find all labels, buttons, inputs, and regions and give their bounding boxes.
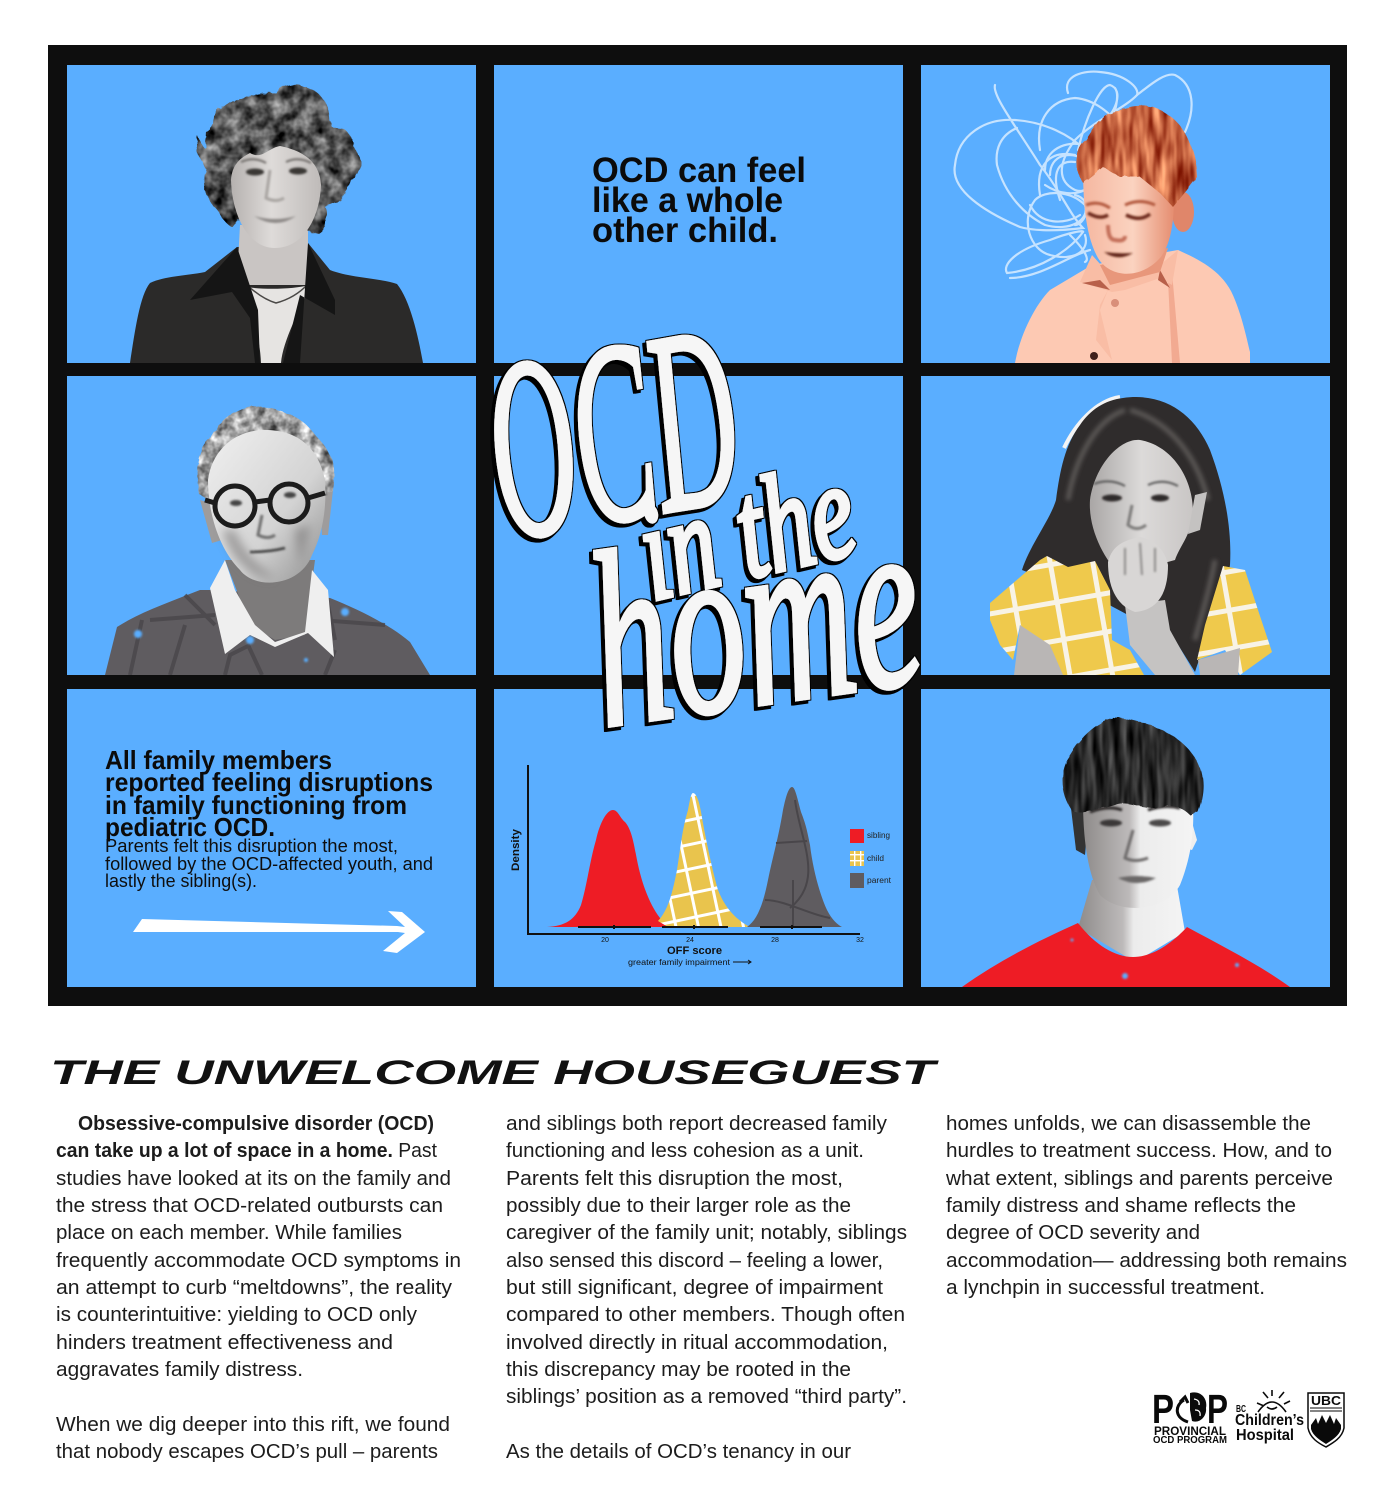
panel heading: pediatric OCD. bbox=[105, 812, 275, 842]
panel heading: reported feeling disruptions bbox=[105, 767, 433, 797]
x tick labels bbox=[601, 937, 864, 944]
article column 3: what extent, siblings and parents perceive bbox=[945, 1168, 1333, 1190]
script title: OCD in the home: OCD bbox=[465, 271, 758, 595]
script title: OCD in the home: in the bbox=[624, 432, 868, 629]
boy shirt shading bbox=[1096, 272, 1180, 363]
article column 1 bbox=[56, 1113, 461, 1463]
girl left shirt bbox=[990, 556, 1144, 675]
y axis label: Density bbox=[510, 828, 522, 871]
woman t-shirt bbox=[251, 286, 305, 363]
quote heading: OCD can feel bbox=[592, 151, 806, 190]
article column 2: caregiver of the family unit; notably, siblings bbox=[506, 1222, 907, 1244]
woman neck bbox=[238, 225, 308, 285]
logo: BC Children's Hospital: BC bbox=[1236, 1404, 1246, 1415]
article column 1: aggravates family distress. bbox=[56, 1359, 303, 1381]
axes bbox=[528, 765, 860, 934]
x tick labels: 20 bbox=[601, 937, 609, 944]
girl ear bbox=[1188, 492, 1207, 534]
legend: sibling bbox=[867, 831, 890, 840]
circular arrow icon bbox=[1177, 1397, 1188, 1422]
scribble bbox=[955, 72, 1192, 278]
man ears bbox=[200, 490, 333, 543]
x tick labels: 24 bbox=[686, 937, 694, 944]
article column 2: but still significant, degree of impairment bbox=[506, 1277, 883, 1299]
x axis note: greater family impairment bbox=[628, 958, 731, 967]
teen features bbox=[1090, 806, 1180, 883]
article column 1: can take up a lot of space in a home. Past bbox=[56, 1140, 437, 1162]
quote heading: like a whole bbox=[592, 181, 783, 220]
girl hand bbox=[1108, 537, 1168, 612]
panel heading bbox=[105, 745, 433, 842]
teen shirt flecks bbox=[1070, 938, 1239, 979]
panel body text: followed by the OCD-affected youth, and bbox=[105, 854, 433, 874]
logo: Provincial OCD Program: P bbox=[1152, 1386, 1174, 1432]
man sweater bbox=[105, 590, 430, 675]
article column 2: involved directly in ritual accommodation, bbox=[506, 1332, 888, 1354]
man hair bbox=[198, 406, 334, 500]
boy collar bbox=[1080, 250, 1178, 292]
logo: UBC shield: UBC bbox=[1311, 1393, 1342, 1408]
man collar bbox=[210, 560, 334, 657]
boy shirt buttons bbox=[1090, 299, 1119, 360]
panel heading: All family members bbox=[105, 745, 332, 775]
x tick labels: 32 bbox=[856, 937, 864, 944]
panel body text: lastly the sibling(s). bbox=[105, 871, 257, 891]
article column 1: that nobody escapes OCD’s pull – parents bbox=[56, 1441, 438, 1463]
woman features bbox=[241, 159, 311, 223]
article column 2: possibly due to their larger role as the bbox=[506, 1195, 851, 1217]
girl face bbox=[1090, 440, 1193, 575]
interval bars bbox=[578, 925, 822, 929]
girl hair shine bbox=[1068, 410, 1215, 640]
article column 1: frequently accommodate OCD symptoms in bbox=[56, 1250, 461, 1272]
panel: woman portrait bbox=[67, 65, 476, 363]
yellow density: child bbox=[658, 793, 750, 927]
logo: UBC shield bbox=[1308, 1393, 1344, 1447]
legend: child bbox=[867, 854, 884, 863]
article column 1: place on each member. While families bbox=[56, 1222, 402, 1244]
arrow bbox=[133, 911, 425, 953]
x axis label: OFF score bbox=[667, 945, 722, 957]
teen hair sides bbox=[1070, 800, 1090, 855]
boy neck bbox=[1100, 248, 1168, 285]
man sweater pattern bbox=[130, 590, 385, 675]
logo: BC Children's Hospital: Children’s bbox=[1235, 1412, 1304, 1429]
girl arms bbox=[1014, 625, 1240, 675]
teen shirt bbox=[962, 923, 1290, 987]
article column 2: and siblings both report decreased family bbox=[506, 1113, 887, 1135]
article column 2: functioning and less cohesion as a unit. bbox=[506, 1140, 864, 1162]
article column 3: degree of OCD severity and bbox=[946, 1222, 1200, 1244]
article column 3: hurdles to treatment success. How, and to bbox=[946, 1140, 1332, 1162]
article column 2: this discrepancy may be rooted in the bbox=[506, 1359, 851, 1381]
logo: BC Children's Hospital bbox=[1235, 1390, 1304, 1444]
article column 1: Obsessive-compulsive disorder (OCD) bbox=[78, 1113, 434, 1135]
boy face bbox=[1083, 165, 1174, 274]
panel: chart bbox=[494, 689, 903, 987]
panel heading: in family functioning from bbox=[105, 790, 407, 820]
article column 2: Parents felt this disruption the most, bbox=[506, 1168, 843, 1190]
teen neck bbox=[1078, 880, 1185, 962]
woman hair bbox=[197, 84, 360, 233]
logo: Provincial OCD Program: P bbox=[1207, 1386, 1228, 1432]
man glasses bbox=[205, 484, 325, 526]
boy shirt bbox=[1015, 250, 1250, 363]
panel body text bbox=[105, 836, 433, 891]
article column 1: studies have looked at its on the family and bbox=[56, 1168, 451, 1190]
logo: BC Children's Hospital: Hospital bbox=[1236, 1427, 1294, 1444]
girl right shirt bbox=[1197, 566, 1272, 675]
woman shirt bbox=[130, 243, 423, 363]
section heading: THE UNWELCOME HOUSEGUEST bbox=[50, 1054, 940, 1092]
density chart bbox=[510, 765, 892, 967]
panel: teenager portrait bbox=[921, 689, 1330, 987]
quote heading bbox=[592, 151, 806, 250]
woman collar bbox=[190, 243, 335, 363]
boy features bbox=[1086, 202, 1155, 257]
teen face bbox=[1083, 795, 1193, 908]
logo: Provincial OCD Program: PROVINCIAL bbox=[1154, 1424, 1226, 1438]
article column 3: family distress and shame reflects the bbox=[946, 1195, 1296, 1217]
script title: OCD in the home: home bbox=[573, 461, 936, 780]
girl features bbox=[1094, 481, 1178, 528]
script title: OCD in the home bbox=[465, 271, 936, 780]
woman necklace bbox=[250, 286, 306, 304]
sun icon bbox=[1257, 1390, 1290, 1412]
woman face bbox=[231, 146, 321, 248]
article column 1: the stress that OCD-related outbursts can bbox=[56, 1195, 443, 1217]
panel: quote bbox=[494, 65, 903, 363]
article column 3: a lynchpin in successful treatment. bbox=[946, 1277, 1265, 1299]
legend bbox=[850, 829, 892, 888]
article column 1: an attempt to curb “meltdowns”, the reality bbox=[56, 1277, 452, 1299]
man sweater flecks bbox=[134, 608, 349, 662]
brain icon bbox=[1190, 1392, 1206, 1422]
article column 3: accommodation— addressing both remains bbox=[946, 1250, 1347, 1272]
man eyes and mouth bbox=[230, 492, 296, 552]
panel: bottom-left text bbox=[67, 689, 476, 987]
panel: girl portrait bbox=[921, 376, 1330, 675]
boy ear bbox=[1172, 192, 1194, 232]
small arrow bbox=[733, 960, 751, 964]
teen hair bbox=[1062, 718, 1203, 815]
article column 3 bbox=[945, 1113, 1347, 1299]
logo: Provincial OCD Program: OCD PROGRAM bbox=[1153, 1435, 1227, 1446]
grey density strokes bbox=[765, 800, 830, 927]
x tick labels: 28 bbox=[771, 937, 779, 944]
article column 2: siblings’ position as a removed “third party”. bbox=[506, 1386, 907, 1408]
man neck bbox=[225, 560, 315, 640]
quote heading: other child. bbox=[592, 211, 778, 250]
panel: boy portrait with scribble bbox=[921, 65, 1330, 363]
article column 1: is counterintuitive: yielding to OCD only bbox=[56, 1304, 417, 1326]
red density: sibling bbox=[547, 810, 672, 927]
girl fingers bbox=[1125, 543, 1155, 575]
legend: parent bbox=[867, 876, 892, 885]
black window frame bbox=[48, 45, 1347, 1006]
article column 1: hinders treatment effectiveness and bbox=[56, 1332, 393, 1354]
article column 2 bbox=[506, 1113, 907, 1463]
article column 1: When we dig deeper into this rift, we found bbox=[56, 1414, 450, 1436]
man shading bbox=[222, 525, 310, 578]
panel body text: Parents felt this disruption the most, bbox=[105, 836, 398, 856]
boy hair bbox=[1076, 106, 1197, 207]
panel: older man portrait bbox=[67, 376, 476, 675]
article column 3: homes unfolds, we can disassemble the bbox=[946, 1113, 1311, 1135]
teen ear bbox=[1185, 815, 1197, 850]
grey density: parent bbox=[747, 787, 842, 927]
article column 2: As the details of OCD’s tenancy in our bbox=[506, 1441, 851, 1463]
logo: Provincial OCD Program bbox=[1152, 1386, 1228, 1446]
girl hair bbox=[1022, 397, 1230, 672]
girl white cut-out edge bbox=[1064, 397, 1120, 448]
panel: centre title background bbox=[494, 376, 903, 675]
boy shirt shadow bbox=[1082, 270, 1170, 290]
man face bbox=[208, 430, 325, 583]
article column 2: compared to other members. Though often bbox=[506, 1304, 905, 1326]
article column 2: also sensed this discord – feeling a lower, bbox=[506, 1250, 883, 1272]
girl forearm bbox=[1125, 600, 1195, 675]
